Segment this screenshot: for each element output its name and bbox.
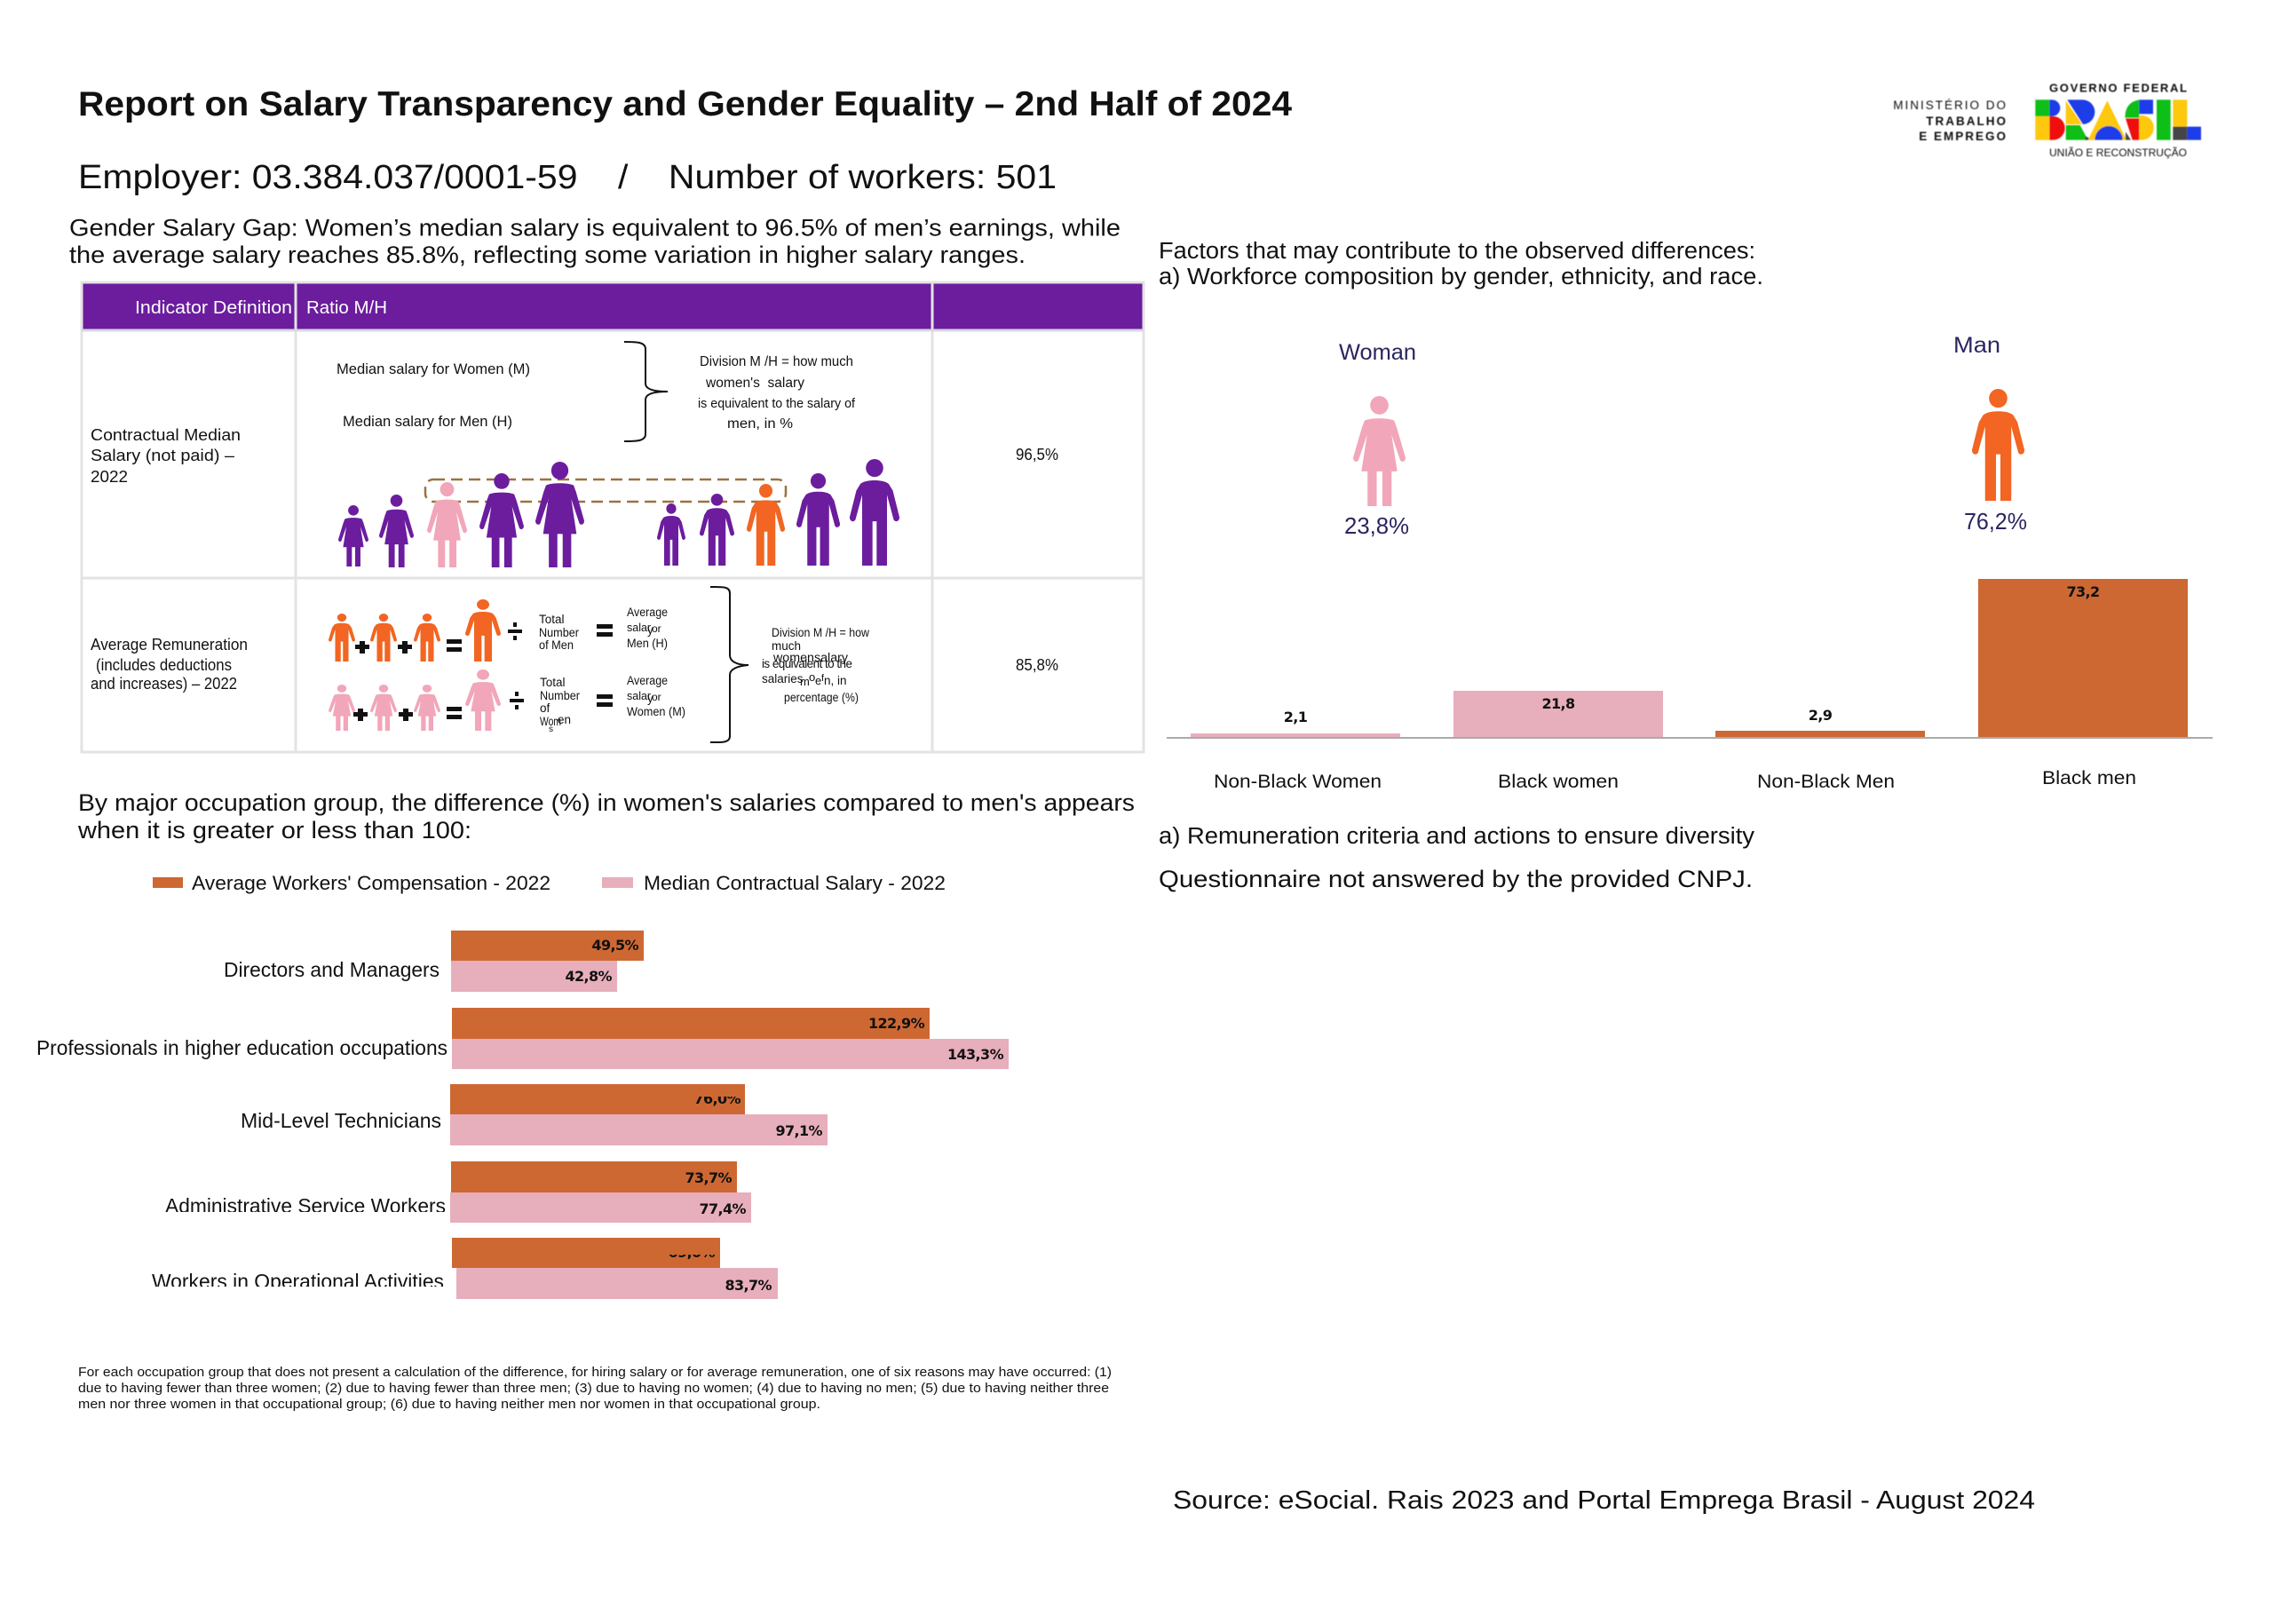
formula text: men: Number <box>539 626 579 639</box>
men average formula icons <box>329 599 501 661</box>
median division note: women's salary <box>705 376 804 391</box>
footnote: men nor three women in that occupational group; (6) due to having neither men nor women in that occupational group. <box>78 1397 820 1412</box>
remuneration criteria <box>1159 824 1754 892</box>
average division note: salaries <box>762 672 804 685</box>
formula text: women: Number <box>540 689 580 702</box>
occupation group intro: By major occupation group, the difference (%) in women's salaries compared to men's appears <box>78 789 1135 816</box>
bars: professionals: 122,9% <box>868 1015 925 1032</box>
gender share: woman <box>1339 340 1416 539</box>
row label: contractual median salary: Salary (not paid) – <box>91 447 234 464</box>
formula text: men: Total <box>539 613 565 626</box>
average division note: o <box>809 670 815 684</box>
government federal caption: GOVERNO FEDERAL <box>2049 82 2187 94</box>
bars: operational activities <box>452 1238 778 1299</box>
footnote <box>78 1365 1112 1412</box>
gender share: man: Man <box>1953 333 2000 358</box>
category labels: Mid-Level Technicians <box>241 1109 441 1132</box>
category labels <box>1214 768 2136 792</box>
salary gap paragraph <box>69 215 1121 268</box>
average division note: percentage (%) <box>784 691 859 704</box>
average division note: e <box>815 674 821 687</box>
formula text: men: salar <box>627 622 651 634</box>
logo: ministry and government <box>1893 82 2201 159</box>
row label: contractual median salary: 2022 <box>91 468 128 486</box>
category labels <box>36 958 447 1293</box>
gender share: man: 76,2% <box>1964 508 2027 535</box>
formula text: women: Total <box>540 676 566 689</box>
employer line: Employer: 03.384.037/0001-59 / Number of workers: 501 <box>78 159 1057 196</box>
bars: professionals <box>452 1008 1009 1069</box>
bars: directors and managers <box>451 931 644 992</box>
category labels: Non-Black Men <box>1757 772 1895 792</box>
formula text: men: y <box>647 623 653 637</box>
horizontal bar chart <box>36 931 1009 1299</box>
average division note: is equivalent to the <box>762 657 852 670</box>
footnote: For each occupation group that does not present a calculation of the difference, for hiring salary or for average remuneration, one of six reasons may have occurred: (1) <box>78 1365 1112 1380</box>
Brasil wordmark <box>2035 99 2201 140</box>
row label: average remuneration: (includes deductions <box>96 656 232 674</box>
ratio value: average: 85,8% <box>1016 656 1058 674</box>
source: Source: eSocial. Rais 2023 and Portal Emprega Brasil - August 2024 <box>1173 1486 2035 1515</box>
row label: average remuneration: Average Remuneration <box>91 636 248 654</box>
row label: average remuneration <box>91 636 248 693</box>
formula text: men: or <box>652 622 661 635</box>
average division note <box>762 626 869 704</box>
union caption: UNIÃO E RECONSTRUÇÃO <box>2049 147 2187 159</box>
median division note: Division M /H = how much <box>700 354 853 369</box>
factors heading <box>1159 239 1763 289</box>
formula text: women: of <box>540 701 550 715</box>
bars: administrative service workers: 77,4% <box>699 1200 747 1217</box>
women average formula icons <box>329 669 501 731</box>
salary gap paragraph: the average salary reaches 85.8%, reflecting some variation in higher salary ranges. <box>69 242 1026 268</box>
legend: Median Contractual Salary - 2022 <box>644 872 946 894</box>
bars: mid-level technicians <box>450 1084 828 1145</box>
men figures ordered by salary <box>657 459 899 566</box>
bars: operational activities: 69,0% <box>668 1244 716 1261</box>
row label: average remuneration: and increases) – 2022 <box>91 675 237 693</box>
remuneration criteria: Questionnaire not answered by the provided CNPJ. <box>1159 866 1753 892</box>
table header <box>82 282 1144 330</box>
ministry name: E EMPREGO <box>1919 130 2008 143</box>
table header: Indicator Definition <box>135 298 292 318</box>
median division note: men, in % <box>727 416 793 432</box>
formula text: men: Men (H) <box>627 637 668 650</box>
bars: directors and managers: 49,5% <box>591 937 639 954</box>
formula text: men <box>539 606 668 652</box>
dashed median highlight <box>425 479 786 502</box>
ministry name <box>1893 99 2008 143</box>
legend <box>153 872 946 894</box>
bars: administrative service workers <box>450 1161 751 1223</box>
formula text: women: y <box>647 692 653 705</box>
average division note: much <box>772 639 801 653</box>
salary gap paragraph: Gender Salary Gap: Women’s median salary is equivalent to 96.5% of men’s earnings, while <box>69 215 1121 242</box>
formula text: women: or <box>652 691 661 703</box>
brace: average <box>710 587 748 742</box>
women figures ordered by salary <box>338 462 584 567</box>
median explanation labels: Median salary for Men (H) <box>343 414 512 430</box>
remuneration criteria: a) Remuneration criteria and actions to ensure diversity <box>1159 824 1754 849</box>
ministry name: TRABALHO <box>1926 115 2008 128</box>
formula text: women: salar <box>627 690 651 702</box>
category labels: Directors and Managers <box>224 958 440 981</box>
row label: contractual median salary: Contractual Median <box>91 426 241 444</box>
average division note: f <box>821 673 825 684</box>
median division note <box>698 354 856 432</box>
formula text: women <box>540 674 685 734</box>
category labels: Black women <box>1498 772 1619 792</box>
gender share: man <box>1953 333 2027 535</box>
indicator table <box>82 282 1144 752</box>
table header: Ratio M/H <box>306 298 387 318</box>
formula text: women: s <box>549 725 553 734</box>
ministry name: MINISTÉRIO DO <box>1893 99 2008 112</box>
bars: mid-level technicians: 97,1% <box>775 1122 823 1139</box>
bars: administrative service workers: 73,7% <box>685 1169 733 1186</box>
gender share: woman: Woman <box>1339 340 1416 365</box>
value labels: 2,1 <box>1284 709 1308 725</box>
formula text: women: Wom <box>540 715 561 728</box>
formula text: women: en <box>558 713 571 726</box>
ratio value: median: 96,5% <box>1016 446 1058 463</box>
formula text: men: Average <box>627 606 668 619</box>
value labels: 2,9 <box>1809 707 1833 724</box>
bars: mid-level technicians: 76,0% <box>693 1090 741 1107</box>
average division note: womensalary <box>772 651 848 664</box>
category labels: Workers in Operational Activities <box>152 1270 444 1293</box>
value labels <box>1284 583 2100 725</box>
column chart: race and gender <box>1167 579 2213 792</box>
factors heading: Factors that may contribute to the observed differences: <box>1159 239 1755 264</box>
formula text: men: of Men <box>539 638 574 652</box>
formula text: women: Women (M) <box>627 705 685 718</box>
category labels: Non-Black Women <box>1214 772 1382 792</box>
formula text: women: Average <box>627 674 668 687</box>
average division note: m <box>800 675 810 688</box>
category labels: Professionals in higher education occupations <box>36 1036 447 1059</box>
occupation group intro <box>77 789 1135 844</box>
bars: professionals: 143,3% <box>947 1046 1004 1063</box>
average division note: n, in <box>824 674 847 687</box>
bars: directors and managers: 42,8% <box>565 968 613 985</box>
formula operators <box>353 622 613 721</box>
value labels: 21,8 <box>1541 695 1575 712</box>
median division note: is equivalent to the salary of <box>698 397 856 411</box>
gender share: woman: 23,8% <box>1344 512 1409 539</box>
title: Report on Salary Transparency and Gender Equality – 2nd Half of 2024 <box>78 85 1292 123</box>
axis <box>1167 737 2213 739</box>
median explanation labels <box>337 361 530 430</box>
row label: contractual median salary <box>91 426 241 486</box>
legend: Average Workers' Compensation - 2022 <box>192 872 550 894</box>
occupation group intro: when it is greater or less than 100: <box>77 817 471 844</box>
value labels: 73,2 <box>2066 583 2100 600</box>
brace: median <box>624 342 668 441</box>
median explanation labels: Median salary for Women (M) <box>337 361 530 377</box>
category labels: Administrative Service Workers <box>165 1194 446 1217</box>
footnote: due to having fewer than three women; (2) due to having fewer than three men; (3) due to having no women; (4) due to having no men; (5) due to having neither three <box>78 1381 1109 1396</box>
factors heading: a) Workforce composition by gender, ethnicity, and race. <box>1159 265 1763 289</box>
average division note: Division M /H = how <box>772 626 869 639</box>
bars: operational activities: 83,7% <box>725 1277 772 1294</box>
category labels: Black men <box>2042 768 2136 788</box>
